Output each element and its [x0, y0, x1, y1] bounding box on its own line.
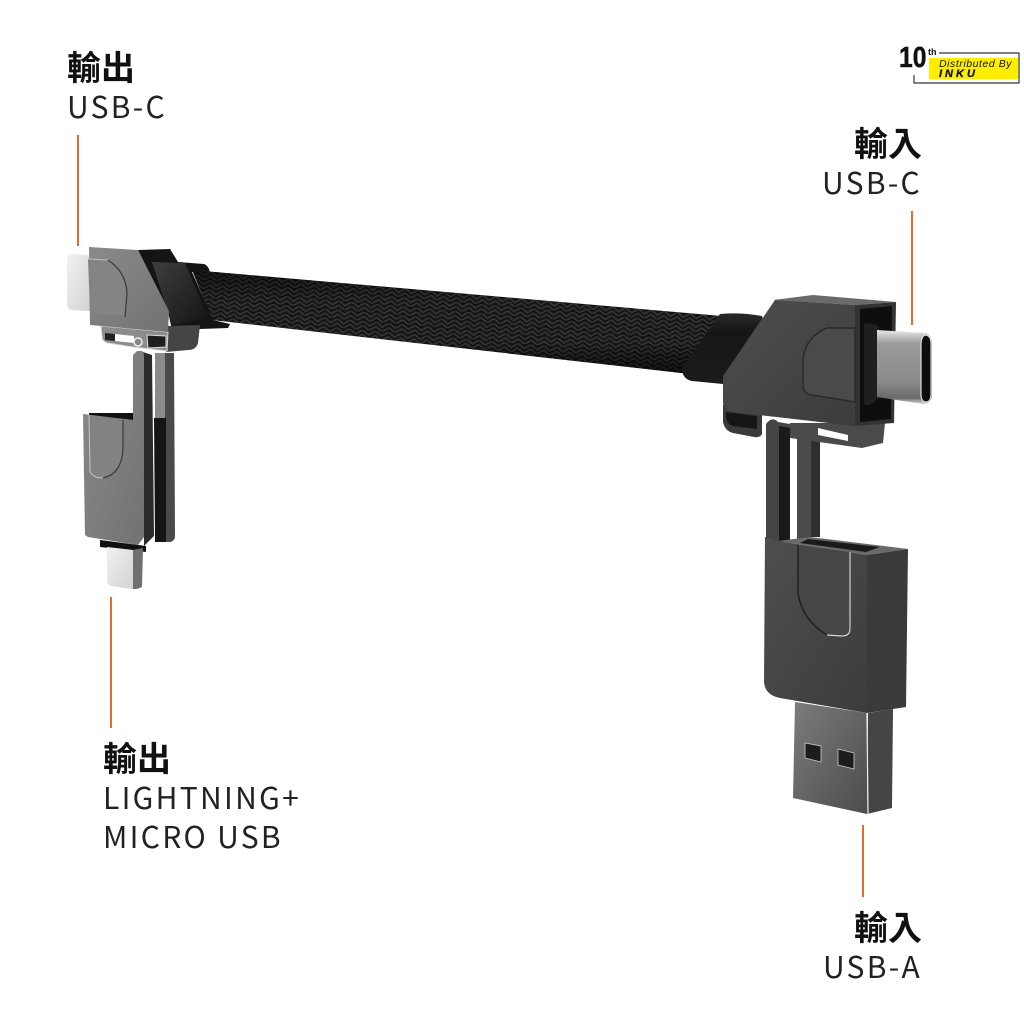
right lower adapter arms [766, 419, 820, 545]
label: input USB-A: USB-A [823, 943, 922, 987]
raised tab [803, 328, 855, 402]
bottom brackets [790, 423, 885, 448]
label: input USB-A: 輸入 [854, 901, 922, 950]
leader line: output USB-C [77, 135, 79, 246]
rear arm [165, 353, 175, 542]
lightning tip [107, 547, 133, 589]
braided cable [192, 270, 722, 374]
right collar [682, 313, 766, 384]
U-shaped recess [89, 415, 123, 478]
label: output USB-C: USB-C [67, 83, 167, 127]
label: input USB-C: 輸入 [854, 117, 922, 166]
logo number: 10 [899, 42, 926, 74]
main plate [723, 300, 855, 426]
label: input USB-C: USB-C [822, 159, 922, 203]
adapter side [867, 549, 908, 713]
U recess [798, 545, 850, 636]
left lower bracket [101, 326, 168, 351]
left raised tab [88, 259, 127, 317]
label: input USB-A [823, 901, 922, 987]
label: output Lightning and Micro USB [103, 732, 301, 857]
leader line: output Lightning [110, 597, 112, 728]
right connector head [682, 295, 932, 448]
USB-A metal plug [793, 702, 867, 814]
slot [89, 413, 133, 420]
label: output USB-C [67, 41, 167, 127]
logo: 10th Distributed By INKU [899, 42, 1020, 84]
adapter front [764, 537, 867, 713]
adapter plate [83, 351, 144, 545]
lightning collar [100, 540, 146, 552]
logo text line two: INKU [939, 68, 978, 80]
logo frame line [913, 52, 1020, 84]
adapter top [778, 537, 908, 555]
USB-C metal tip [877, 330, 932, 404]
label: output Lightning and Micro USB: 輸出 [103, 732, 171, 781]
USB-A adapter [764, 537, 908, 814]
left collar [138, 249, 230, 330]
top face [773, 295, 896, 305]
dark side arm [143, 352, 154, 546]
label: output Lightning and Micro USB: LIGHTNING+ [103, 774, 301, 818]
label: output USB-C: 輸出 [67, 41, 135, 90]
left connector head [67, 247, 230, 352]
left main plate [89, 247, 169, 332]
left USB-C metal tip [67, 254, 90, 311]
leader line: input USB-C [911, 211, 913, 325]
logo superscript: th [928, 47, 936, 57]
left lower adapter [83, 351, 175, 589]
label: input USB-C [822, 117, 922, 203]
logo yellow tag [929, 58, 1018, 79]
label: output Lightning and Micro USB: MICRO USB [103, 813, 283, 857]
leader line: input USB-A [862, 825, 864, 897]
USB-A holes [805, 743, 821, 762]
front opening [855, 302, 896, 426]
logo text line one: Distributed By [939, 58, 1012, 70]
